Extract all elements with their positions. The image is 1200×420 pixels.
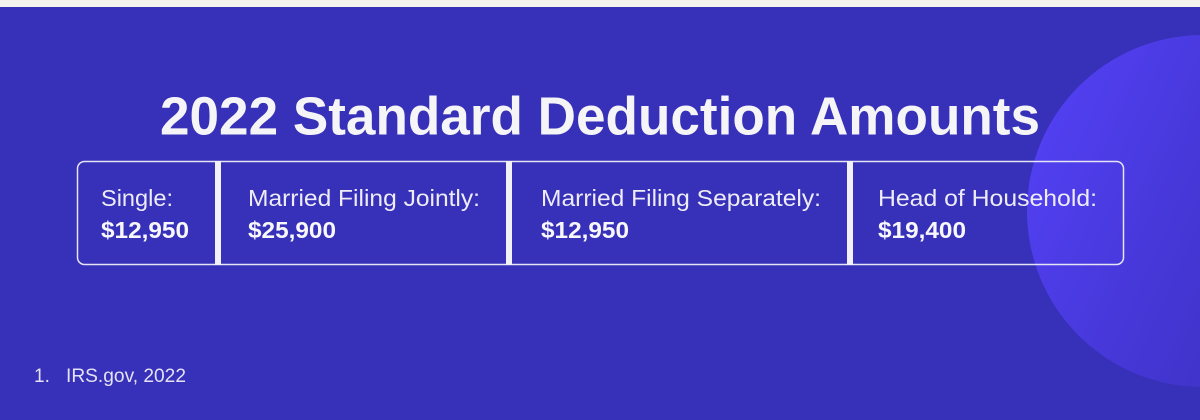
cell: single: $12,950: [101, 217, 189, 243]
column dividers: [215, 161, 853, 265]
cell: married filing separately: Married Filing Separately:: [541, 185, 821, 211]
deduction table: [78, 161, 1124, 265]
decorative circle: [1027, 35, 1200, 387]
cell: head of household: [878, 185, 1097, 243]
cell: married filing jointly: Married Filing Jointly:: [248, 185, 480, 211]
cell: married filing jointly: $25,900: [248, 217, 336, 243]
cell: head of household: $19,400: [878, 217, 966, 243]
cell: head of household: Head of Household:: [878, 185, 1097, 211]
cell: married filing jointly: [248, 185, 480, 243]
cell: married filing separately: $12,950: [541, 217, 629, 243]
cell: married filing separately: [541, 185, 821, 243]
table outline: [78, 162, 1124, 264]
footnote: 1.: [34, 366, 50, 387]
title: 2022 Standard Deduction Amounts: [160, 86, 1040, 146]
top strip: [0, 0, 1200, 7]
footnote: IRS.gov, 2022: [66, 366, 186, 387]
cell: single: Single:: [101, 185, 173, 211]
cell: single: [101, 185, 189, 243]
